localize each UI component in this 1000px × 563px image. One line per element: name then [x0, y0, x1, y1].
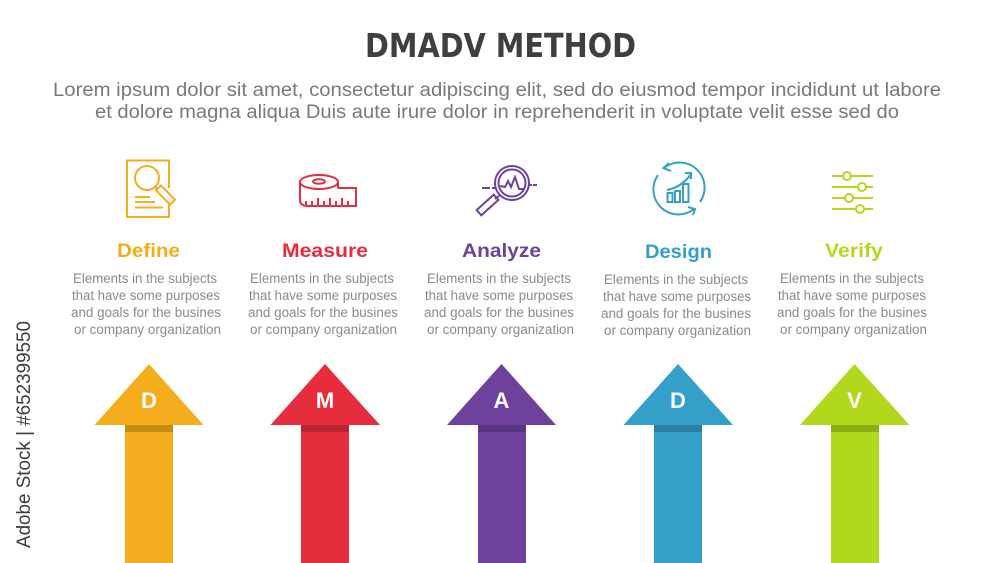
arrow: A	[447, 364, 556, 563]
intro paragraph: et dolore magna aliqua Duis aute irure dolor in reprehenderit in voluptate velit esse sed do	[95, 102, 899, 123]
description: Measure: Elements in the subjects	[250, 271, 394, 286]
icon: document with magnifier	[127, 160, 175, 217]
heading: Design: Design	[645, 242, 712, 263]
arrow: D: D	[141, 388, 157, 413]
arrow: M: M	[316, 388, 334, 413]
description: Define: Elements in the subjects	[73, 271, 217, 286]
description: Measure: or company organization	[250, 322, 397, 337]
description: Design: that have some purposes	[603, 289, 751, 304]
arrow: V	[800, 364, 910, 563]
intro paragraph: Lorem ipsum dolor sit amet, consectetur adipiscing elit, sed do eiusmod tempor incididunt ut labore	[53, 80, 941, 101]
description: Analyze: or company organization	[427, 322, 574, 337]
arrow: D	[94, 364, 204, 563]
icon: sliders	[832, 172, 873, 213]
description: Measure	[248, 271, 398, 337]
description: Verify: or company organization	[780, 322, 927, 337]
column: Analyze	[424, 166, 574, 563]
description: Analyze: that have some purposes	[425, 288, 573, 303]
description: Analyze: and goals for the busines	[424, 305, 574, 320]
arrow: A: A	[494, 388, 510, 413]
description: Design: or company organization	[604, 323, 751, 338]
title: DMADV METHOD	[365, 26, 636, 65]
icon: magnifier with chart	[477, 166, 537, 215]
arrow: V: V	[847, 388, 862, 413]
description: Define	[71, 271, 221, 337]
heading: Verify: Verify	[825, 241, 883, 262]
icon: measuring tape	[300, 175, 356, 206]
description: Design	[601, 272, 751, 338]
stock id label: Adobe Stock | #652399550	[14, 321, 35, 548]
description: Define: and goals for the busines	[71, 305, 221, 320]
description: Define: or company organization	[74, 322, 221, 337]
arrow: D	[624, 364, 733, 563]
column: Measure	[248, 175, 398, 563]
description: Measure: that have some purposes	[249, 288, 397, 303]
description: Measure: and goals for the busines	[248, 305, 398, 320]
arrow: D: D	[670, 388, 686, 413]
description: Verify: that have some purposes	[778, 288, 926, 303]
heading: Define: Define	[117, 241, 180, 262]
heading: Analyze: Analyze	[462, 241, 541, 262]
description: Analyze: Elements in the subjects	[427, 271, 571, 286]
icon: cycle with bar chart	[653, 163, 705, 215]
intro paragraph	[53, 80, 941, 123]
description: Define: that have some purposes	[72, 288, 220, 303]
column: Design	[601, 163, 751, 563]
description: Verify	[777, 271, 927, 337]
description: Design: and goals for the busines	[601, 306, 751, 321]
description: Verify: Elements in the subjects	[780, 271, 924, 286]
description: Verify: and goals for the busines	[777, 305, 927, 320]
arrow: M	[270, 364, 380, 563]
description: Analyze	[424, 271, 574, 337]
description: Design: Elements in the subjects	[604, 272, 748, 287]
heading: Measure: Measure	[282, 241, 368, 262]
column: Verify	[777, 172, 927, 563]
column: Define	[71, 160, 221, 563]
